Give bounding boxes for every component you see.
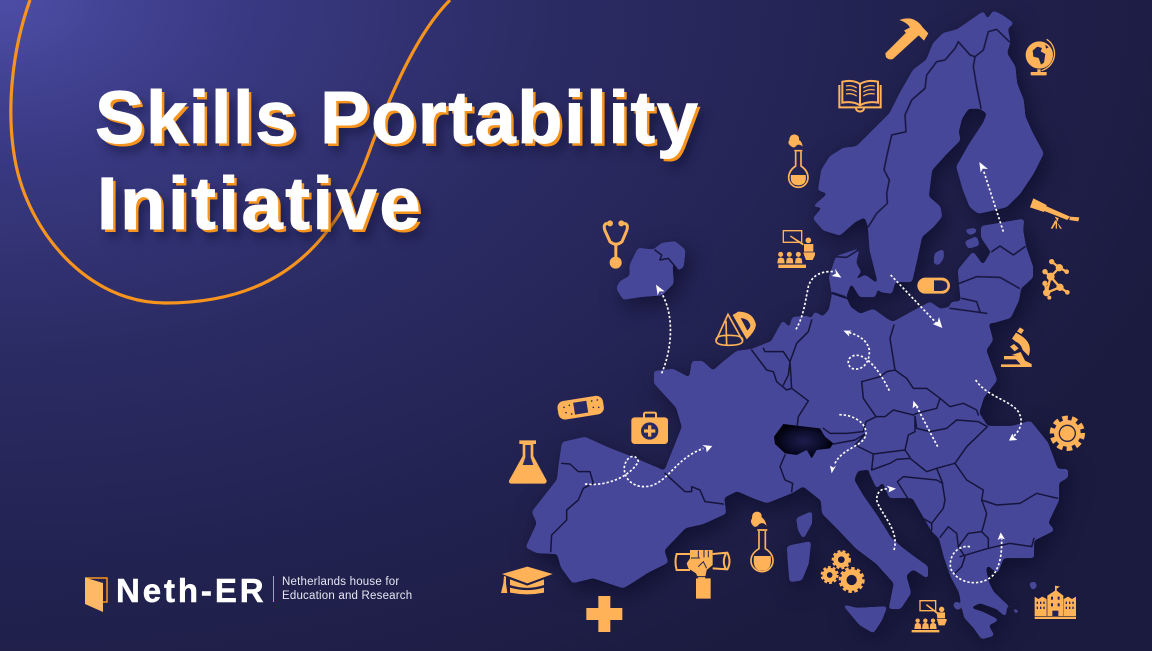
icon: door — [85, 577, 108, 612]
Danish islands — [852, 275, 878, 297]
icon: telescope — [1030, 198, 1079, 229]
Sardinia — [787, 542, 811, 582]
icon: three gears — [822, 552, 863, 591]
icon: teacher with class — [777, 231, 815, 268]
Switzerland — [774, 424, 833, 458]
logo divider — [273, 576, 274, 602]
icon: microscope — [1001, 327, 1032, 367]
logo tagline: Education and Research — [282, 590, 412, 602]
Scandinavia landmass — [813, 11, 1043, 293]
title: Initiative — [97, 162, 423, 245]
icon: globe — [1026, 39, 1055, 75]
icon: Erlenmeyer flask — [509, 440, 547, 484]
migration arrows — [585, 162, 1021, 583]
arrow: Germany loop — [843, 331, 889, 391]
icon: university building — [1035, 586, 1076, 619]
arrow: Greece loop — [950, 532, 1005, 583]
icon: stethoscope — [604, 220, 627, 269]
icon: flask with smoke (south) — [751, 512, 773, 572]
title — [95, 76, 704, 245]
Gotland — [934, 249, 943, 265]
logo wordmark: Neth-ER — [116, 572, 266, 609]
arrow: Sweden to Poland — [891, 275, 942, 328]
Sicily — [843, 605, 887, 633]
arrow: Poland to Romania — [976, 380, 1021, 441]
Aegean islands — [953, 582, 1037, 613]
title: Skills Portability — [95, 76, 700, 159]
icon: cone and protractor — [716, 312, 756, 345]
icon: fist holding diploma — [675, 550, 729, 599]
arrow: Austria to Italy — [830, 415, 866, 473]
arrow: Italy to Croatia — [877, 486, 896, 550]
icon: medical cross — [586, 596, 622, 632]
arrow: Netherlands to Denmark — [796, 269, 841, 329]
map of Europe — [527, 11, 1067, 638]
icon: medical kit — [631, 413, 668, 444]
icon: bandage — [556, 395, 605, 420]
logo tagline — [282, 576, 412, 602]
Corsica — [797, 512, 812, 538]
country borders — [551, 29, 1058, 573]
icon: pill capsule — [917, 278, 950, 294]
Estonian islands — [965, 228, 979, 248]
icon: flask with smoke — [788, 134, 808, 187]
continental Europe landmass — [527, 220, 1067, 638]
icon: gear — [1053, 419, 1082, 448]
icon: molecule — [1042, 259, 1070, 300]
icon: hammer — [885, 18, 928, 59]
logo: Neth-ER — [85, 572, 412, 612]
arrow: Estonia to Finland — [979, 162, 1003, 232]
Ireland — [617, 242, 685, 299]
arrow: Hungary to Czechia — [913, 401, 938, 447]
icon: open book — [839, 81, 881, 112]
arrow: Spain to France — [585, 445, 712, 487]
icon: teacher with class (south) — [912, 601, 947, 632]
arrow: France to Ireland — [656, 285, 670, 373]
logo tagline: Netherlands house for — [282, 576, 399, 588]
icon: graduation cap — [501, 567, 553, 594]
